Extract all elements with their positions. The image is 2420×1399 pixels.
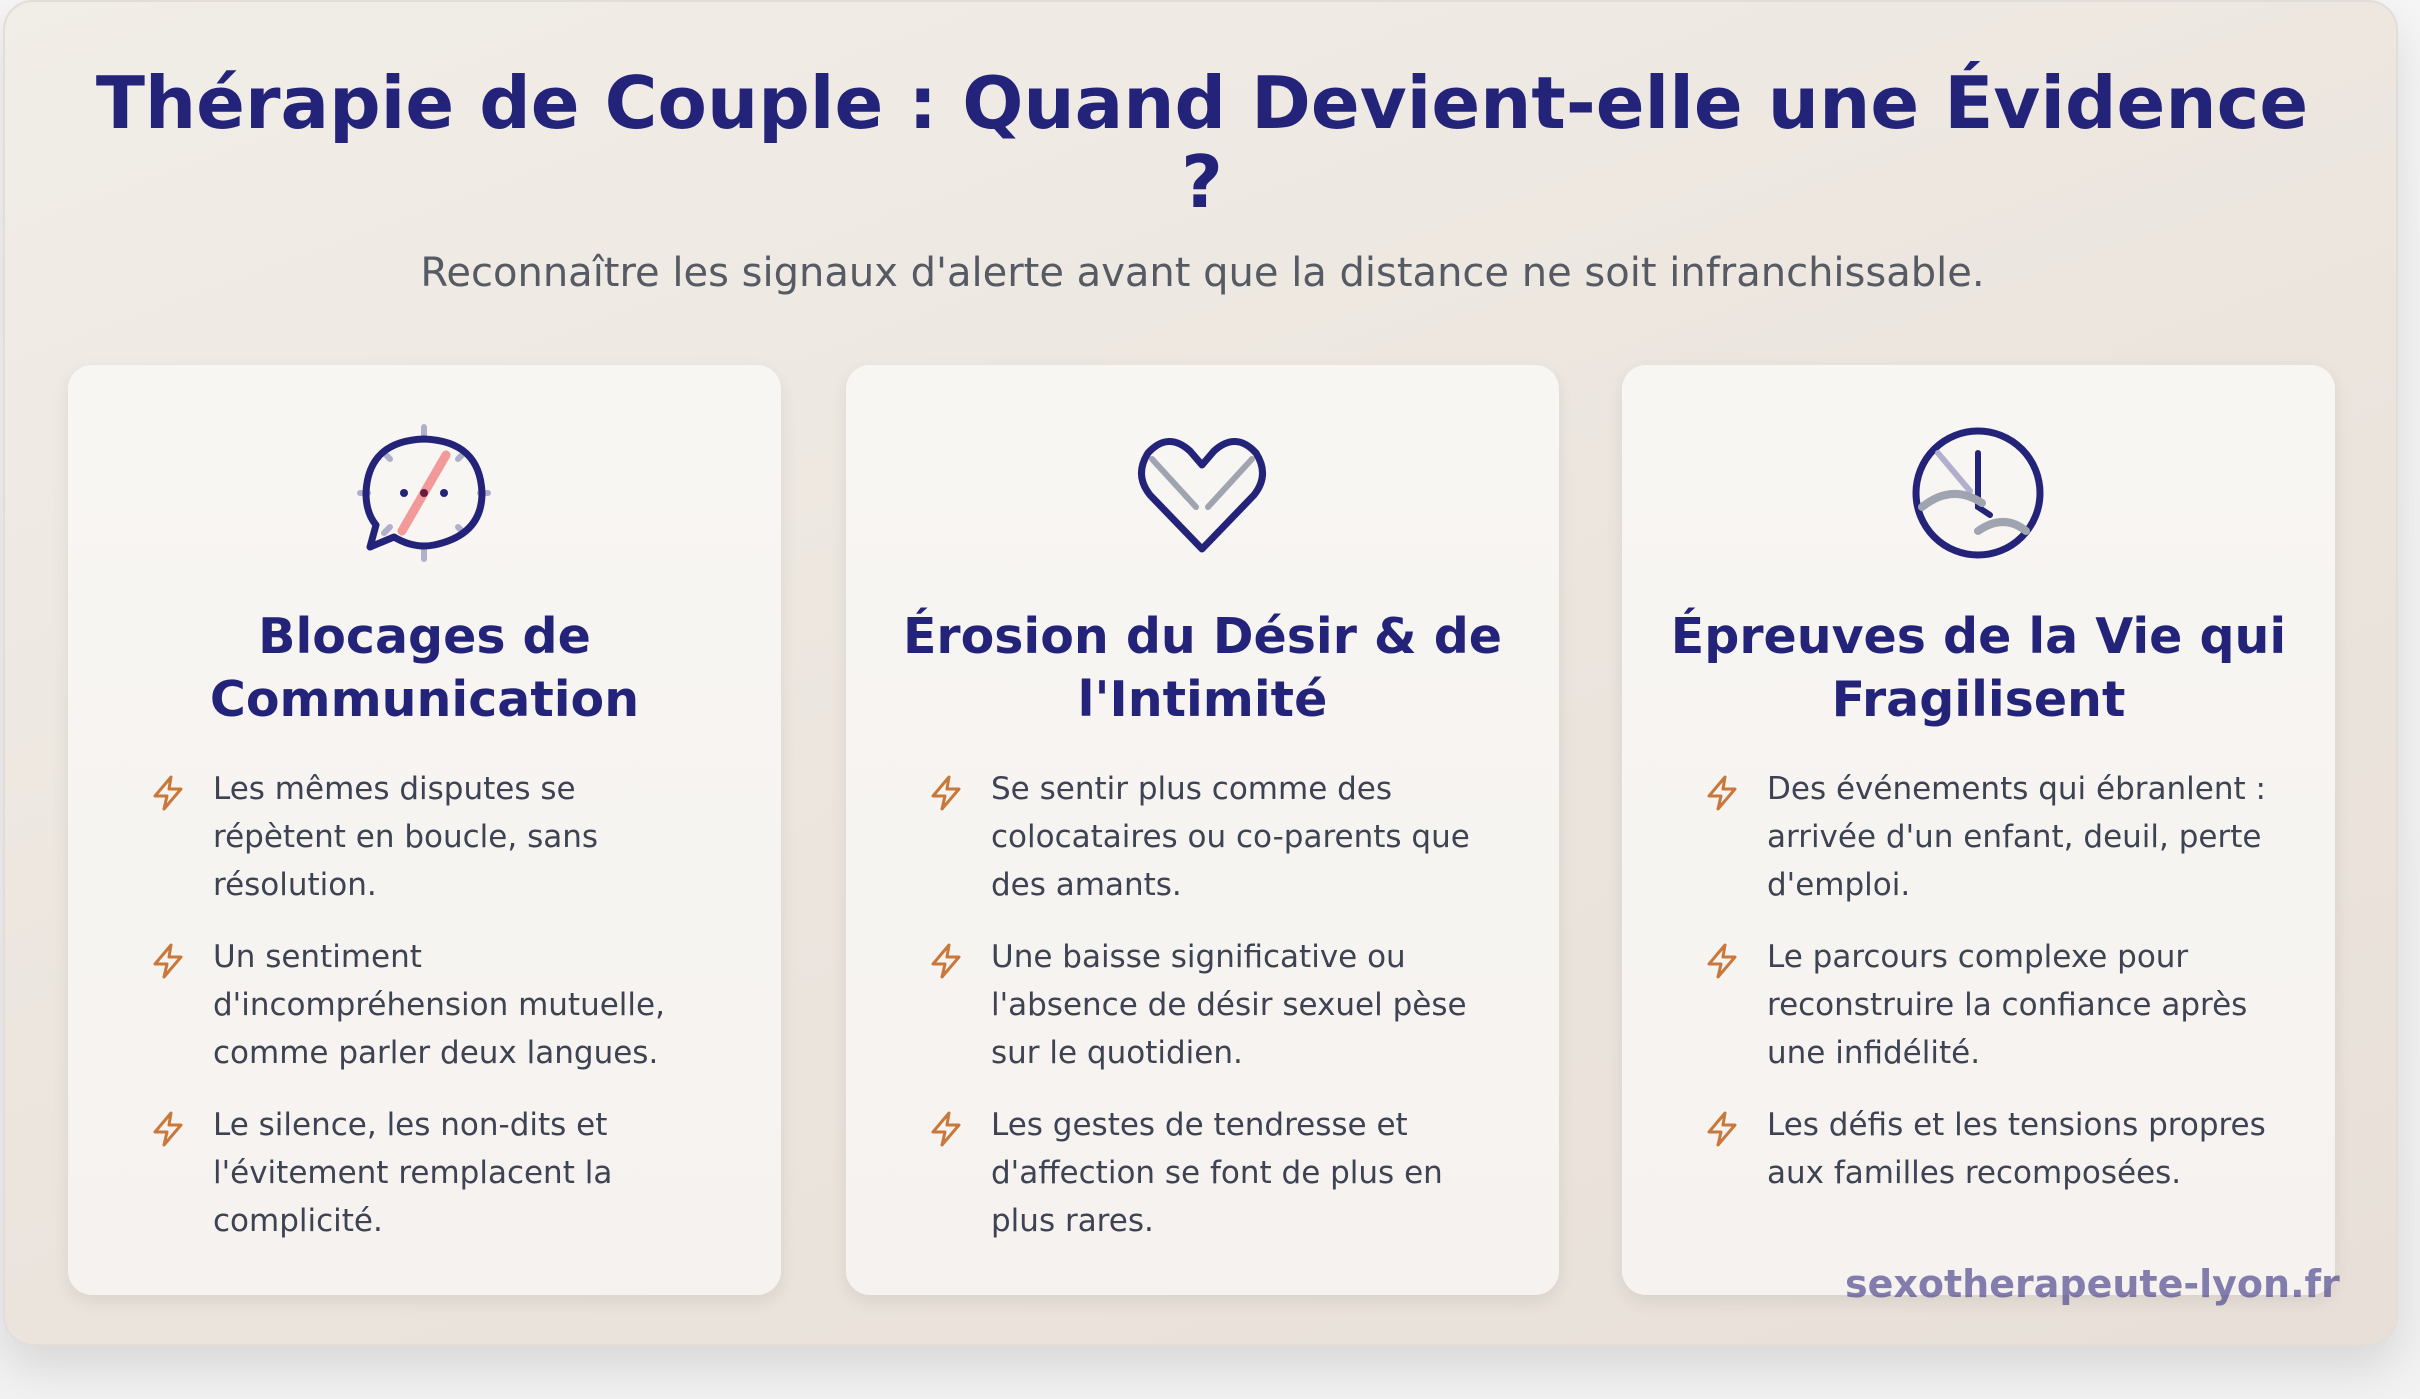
heading: Érosion du Désir & de l'Intimité	[903, 608, 1502, 728]
list	[1707, 771, 2266, 1191]
bullet 1: Les mêmes disputes se répètent en boucle, sans résolution.	[213, 771, 598, 903]
icon: broken heart	[1138, 438, 1266, 552]
bullet 2: Un sentiment d'incompréhension mutuelle, comme parler deux langues.	[213, 939, 665, 1071]
heading: Épreuves de la Vie qui Fragilisent	[1671, 608, 2286, 728]
bullet 3: Les gestes de tendresse et d'affection se font de plus en plus rares.	[991, 1107, 1443, 1239]
panel: communication	[68, 365, 781, 1295]
bullet 1: Des événements qui ébranlent : arrivée d'un enfant, deuil, perte d'emploi.	[1767, 771, 2266, 903]
panel: desire	[846, 365, 1559, 1295]
icon: clock	[1912, 428, 2044, 558]
heading: Blocages de Communication	[210, 608, 639, 728]
bullet 3: Le silence, les non-dits et l'évitement remplacent la complicité.	[213, 1107, 612, 1239]
bullet 2: Une baisse significative ou l'absence de désir sexuel pèse sur le quotidien.	[991, 939, 1467, 1071]
list	[153, 771, 665, 1239]
bullet 2: Le parcours complexe pour reconstruire la confiance après une infidélité.	[1767, 939, 2247, 1071]
watermark: sexotherapeute-lyon.fr	[1845, 1262, 2340, 1306]
panel: life trials	[1622, 365, 2335, 1295]
bullet 3: Les défis et les tensions propres aux familles recomposées.	[1767, 1107, 2266, 1191]
title: Thérapie de Couple : Quand Devient-elle une Évidence ?	[96, 61, 2308, 224]
bullet 1: Se sentir plus comme des colocataires ou co-parents que des amants.	[991, 771, 1470, 903]
icon: speech bubble blocked	[357, 424, 491, 562]
list	[931, 771, 1470, 1239]
subtitle: Reconnaître les signaux d'alerte avant que la distance ne soit infranchissable.	[420, 250, 1985, 296]
